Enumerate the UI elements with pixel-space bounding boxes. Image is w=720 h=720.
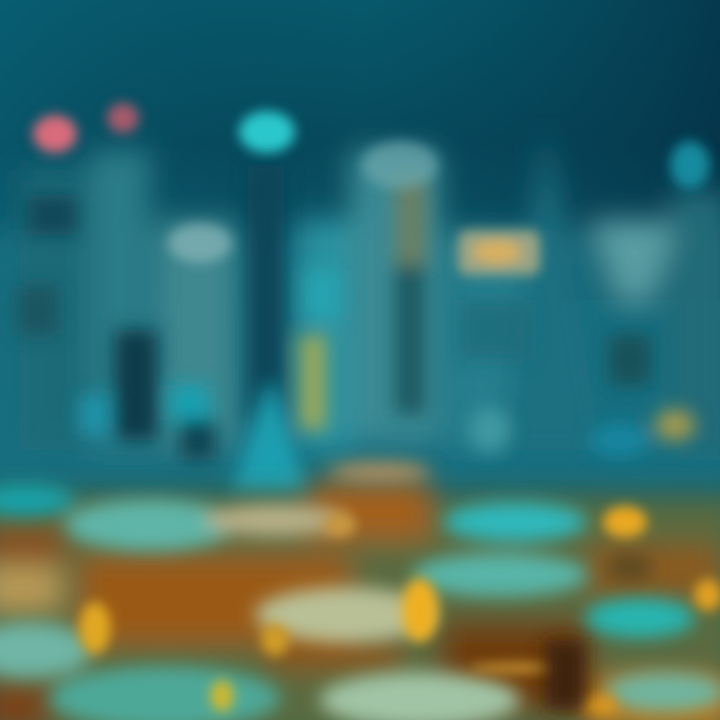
skyline buildings <box>0 130 720 490</box>
coin tops <box>0 462 720 720</box>
dark coin shadow <box>545 555 650 710</box>
gold highlights <box>79 506 720 715</box>
dark building details <box>18 165 695 495</box>
coins <box>0 462 720 720</box>
coloured rooftop lights <box>33 103 710 275</box>
coin bases <box>0 480 720 720</box>
